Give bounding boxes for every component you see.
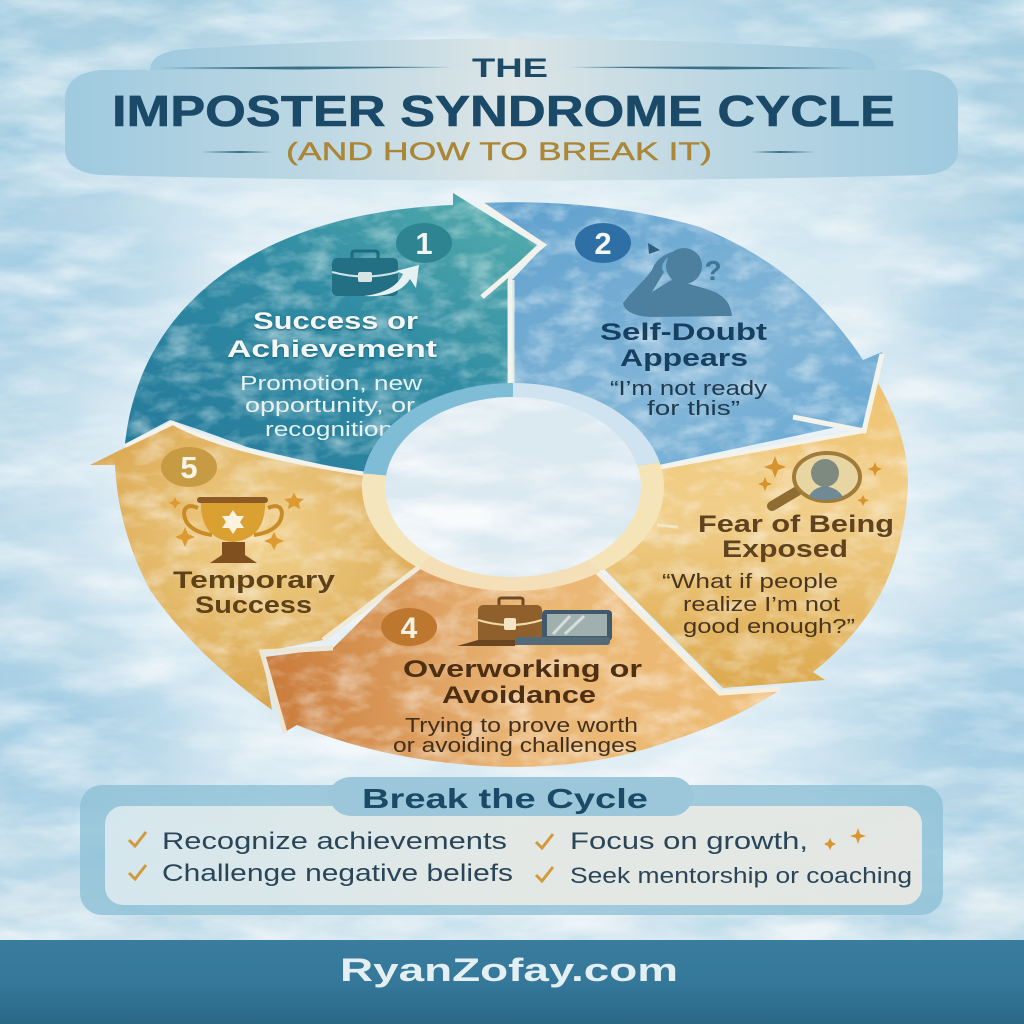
- icon: doubtful person: [623, 243, 732, 317]
- heading: Self-Doubt: [600, 319, 767, 346]
- title banner: [65, 38, 958, 180]
- panel: break the cycle: Seek mentorship or coaching: [570, 863, 912, 888]
- segment 1: success: opportunity, or: [245, 395, 415, 417]
- panel heading: Break the Cycle: [362, 783, 648, 814]
- segment 1: success: recognition: [265, 419, 393, 441]
- icon: trophy: [169, 493, 304, 563]
- description: Trying to prove worth: [405, 715, 638, 737]
- segment 1: success: [125, 193, 537, 473]
- panel: break the cycle: Focus on growth,: [570, 828, 808, 855]
- sparkles: [824, 828, 866, 850]
- heading: Overworking or: [403, 656, 642, 683]
- center ring and hole: [362, 383, 664, 591]
- badge 4: [381, 608, 437, 646]
- heading: Temporary: [173, 567, 336, 594]
- icon: briefcase with arrow: [332, 251, 419, 296]
- badge 1: [396, 223, 452, 263]
- footer url: RyanZofay.com: [340, 952, 678, 988]
- title: main: IMPOSTER SYNDROME CYCLE: [112, 87, 895, 136]
- icon: magnifier over person: [758, 453, 882, 506]
- list items: Recognize achievements: [162, 828, 507, 855]
- segment dividers: [125, 203, 882, 733]
- icon: doubtful person: ?: [704, 255, 722, 286]
- segment 3: fear of being exposed: [600, 383, 908, 688]
- badge 2: [575, 223, 631, 263]
- heading: Fear of Being: [698, 511, 894, 538]
- badge 1: 1: [415, 226, 433, 261]
- segment 4: overworking or avoidance: Avoidance: [442, 682, 596, 709]
- segment 3: fear of being exposed: realize I’m not: [683, 594, 841, 616]
- badge 5: 5: [180, 450, 198, 485]
- segment 2: self-doubt: Appears: [620, 345, 748, 372]
- quote: “What if people: [662, 571, 838, 593]
- segment 1: success: Achievement: [227, 336, 437, 363]
- segment 3: fear of being exposed: good enough?”: [683, 616, 855, 638]
- segment 5: temporary success: Success: [195, 592, 312, 619]
- panel: break the cycle: [80, 777, 943, 915]
- segment 2: self-doubt: for this”: [647, 398, 740, 420]
- title: the: THE: [472, 53, 548, 83]
- segment 2: self-doubt: [480, 202, 882, 469]
- icon: briefcase and laptop: [457, 598, 612, 646]
- checkmarks: [129, 832, 553, 881]
- panel: break the cycle: Challenge negative beliefs: [162, 860, 513, 887]
- footer band: [0, 940, 1024, 1024]
- badge 4: 4: [401, 612, 418, 645]
- badge 2: 2: [594, 226, 612, 261]
- segment 3: fear of being exposed: Exposed: [722, 536, 848, 563]
- cycle wheel: [90, 193, 908, 767]
- quote: “I’m not ready: [610, 378, 767, 400]
- segment 4: overworking or avoidance: [265, 562, 780, 767]
- segment 5: temporary success: [90, 424, 430, 710]
- subtitle: (AND HOW TO BREAK IT): [286, 138, 712, 166]
- heading: Success or: [253, 308, 418, 335]
- segment 4: overworking or avoidance: or avoiding challenges: [393, 735, 637, 757]
- description: Promotion, new: [240, 373, 423, 395]
- badge 5: [161, 447, 217, 487]
